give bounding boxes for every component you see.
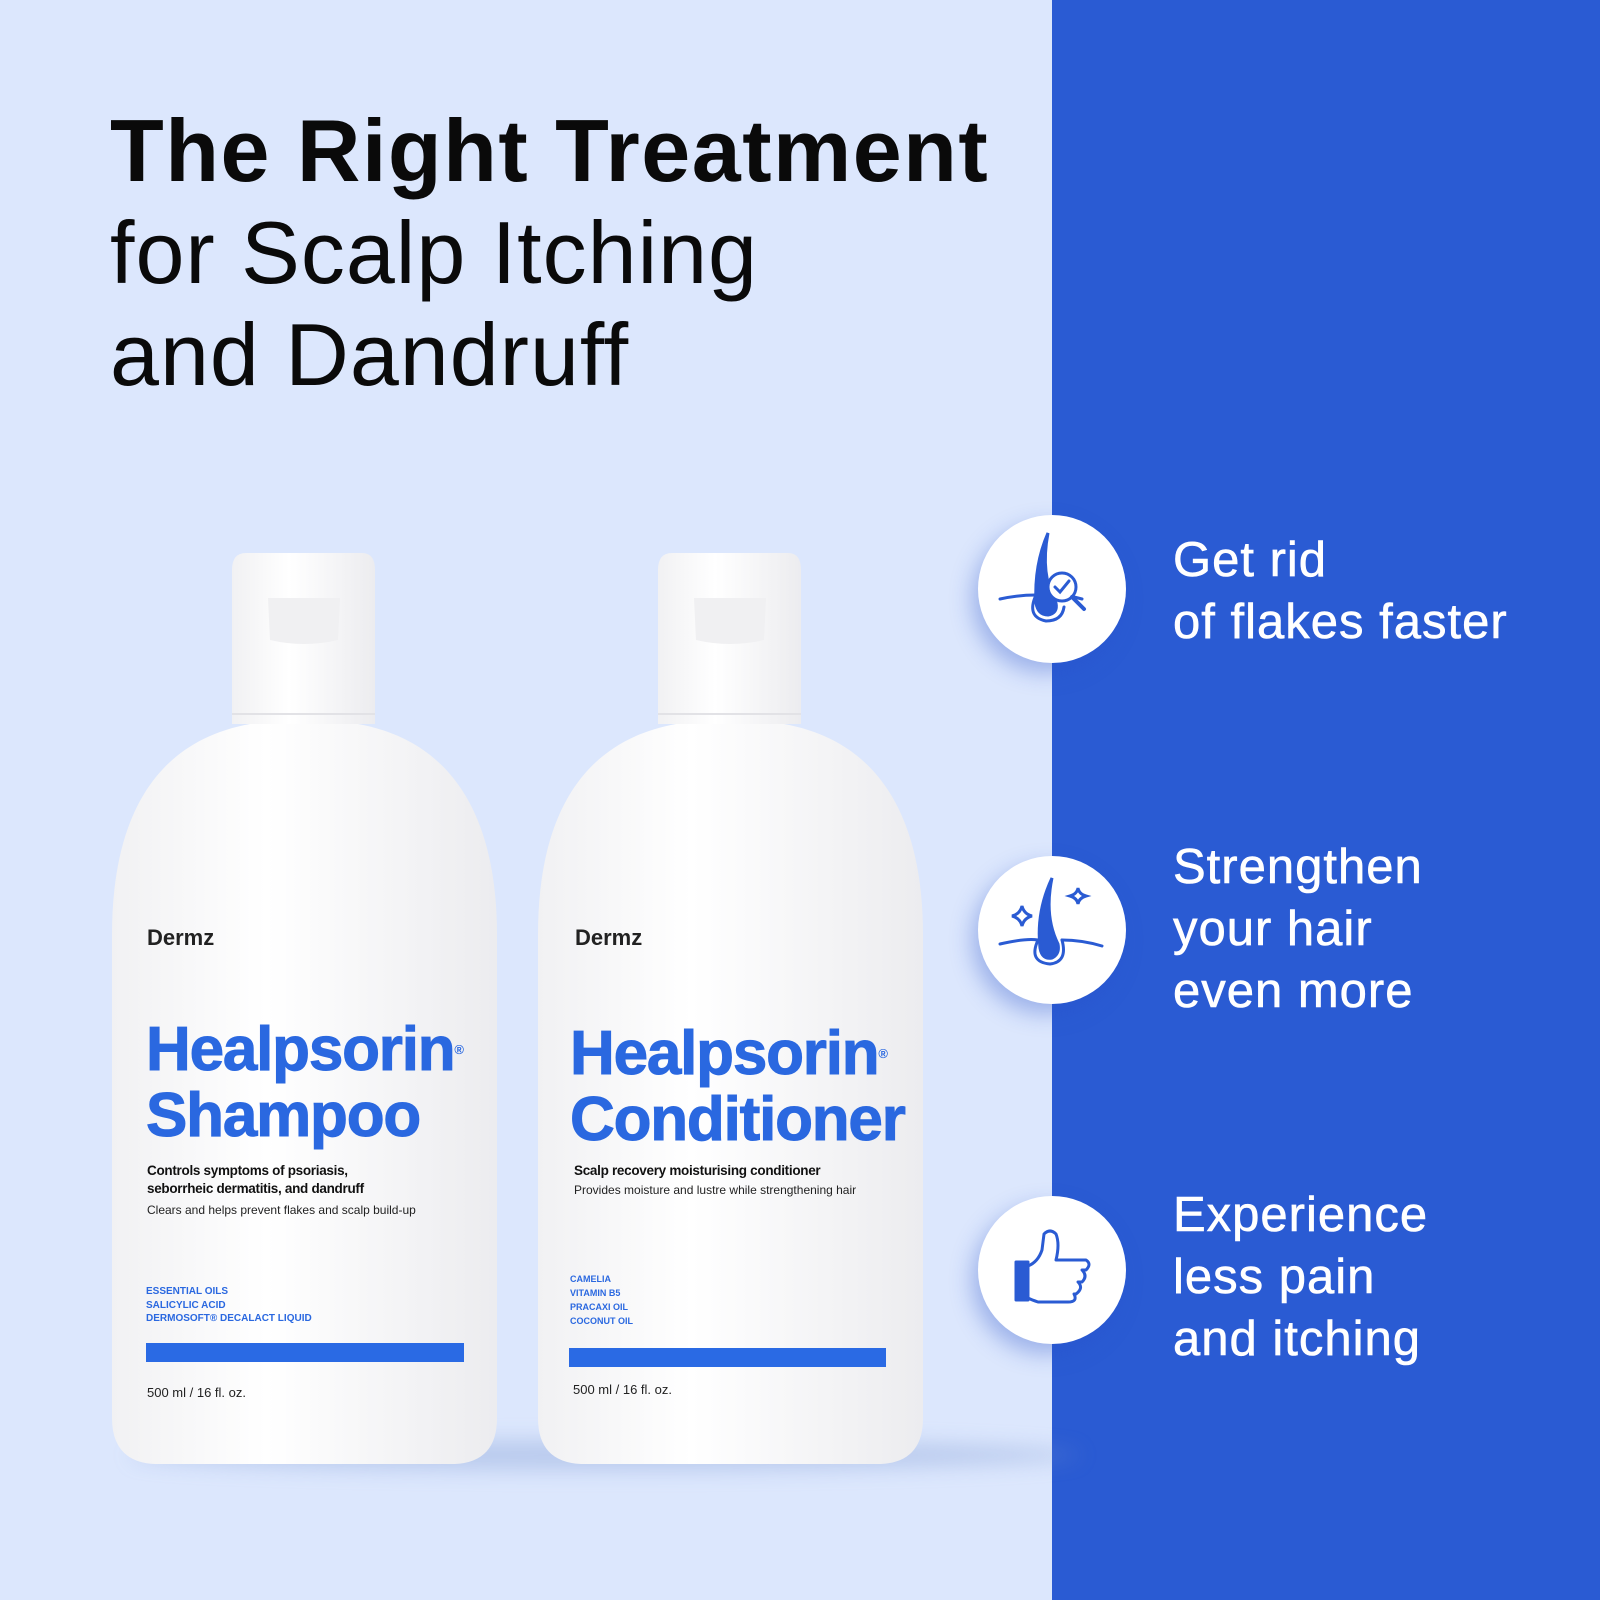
bottle: shampoo: SALICYLIC ACID <box>146 1300 226 1310</box>
bottle: conditioner: Provides moisture and lustre while strengthening hair <box>574 1183 856 1197</box>
bottle: conditioner <box>538 553 923 1464</box>
bottle: conditioner: COCONUT OIL <box>570 1316 633 1326</box>
text: feature 1: Get rid <box>1173 533 1327 587</box>
text: feature 3 <box>1173 1188 1428 1366</box>
text: feature 1 <box>1173 533 1508 649</box>
bottle: conditioner: Scalp recovery moisturising conditioner <box>574 1163 820 1178</box>
icon: hair with magnifier <box>978 515 1126 663</box>
icon: thumbs up <box>978 1196 1126 1344</box>
text: feature 2: your hair <box>1173 902 1373 956</box>
bottle: conditioner: CAMELIA <box>570 1274 611 1284</box>
title: for Scalp Itching <box>110 203 758 302</box>
text: feature 2: even more <box>1173 964 1414 1018</box>
bottle: shampoo: Shampoo <box>146 1081 420 1150</box>
title: The Right Treatment <box>110 101 989 200</box>
bottle: shampoo: ESSENTIAL OILS <box>146 1286 228 1297</box>
bottle: shampoo: DERMOSOFT® DECALACT LIQUID <box>146 1313 312 1324</box>
text: feature 2: Strengthen <box>1173 840 1423 894</box>
bottle: conditioner: Conditioner <box>570 1085 905 1154</box>
icon: hair with sparkles <box>978 856 1126 1004</box>
title: and Dandruff <box>110 305 629 404</box>
bottle: shampoo: 500 ml / 16 fl. oz. <box>147 1385 246 1400</box>
bottle: shampoo: Clears and helps prevent flakes and scalp build-up <box>147 1203 416 1217</box>
bottle: shampoo: Controls symptoms of psoriasis, <box>147 1163 348 1178</box>
bottle: conditioner: VITAMIN B5 <box>570 1288 620 1298</box>
panel: right blue <box>1052 0 1600 1600</box>
text: feature 3: less pain <box>1173 1250 1375 1304</box>
bottle: shampoo: Healpsorin® <box>146 1015 463 1084</box>
bottle: conditioner: Healpsorin® <box>570 1019 887 1088</box>
text: feature 3: Experience <box>1173 1188 1428 1242</box>
bottle shadow <box>130 1440 1080 1470</box>
text: feature 2 <box>1172 840 1423 1018</box>
text: feature 3: and itching <box>1173 1312 1421 1366</box>
bottle: conditioner: 500 ml / 16 fl. oz. <box>573 1382 672 1397</box>
bottle: shampoo <box>112 553 497 1464</box>
text: feature 1: of flakes faster <box>1173 595 1508 649</box>
bottle: shampoo: Dermz <box>147 925 214 950</box>
title <box>110 101 989 404</box>
bottle: conditioner: Dermz <box>575 925 642 950</box>
bottle: shampoo: seborrheic dermatitis, and dandruff <box>147 1181 364 1196</box>
bottle: conditioner: PRACAXI OIL <box>570 1302 628 1312</box>
